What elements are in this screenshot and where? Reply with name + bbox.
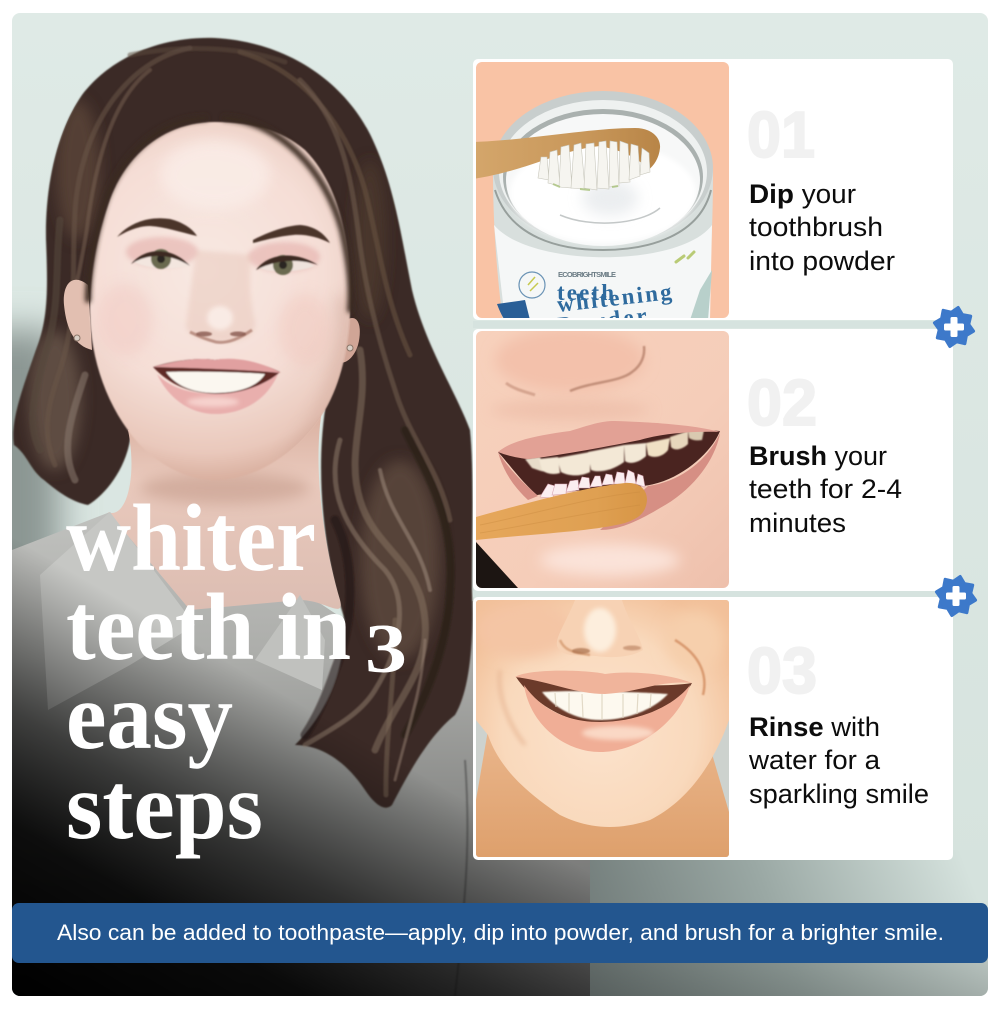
hair tone patches [29, 100, 440, 660]
earrings [74, 335, 80, 341]
step text: sparkling smile [749, 779, 929, 809]
icon: plus badge 2 [932, 572, 980, 620]
photo: jar of whitening powder with toothbrush: Powder [556, 303, 648, 338]
eye shadows [126, 237, 198, 267]
toothbrush handle [473, 128, 660, 179]
step text: minutes [749, 508, 846, 538]
woman portrait [12, 38, 590, 996]
jar rim glass [493, 91, 713, 245]
step text: Rinse with [749, 712, 880, 742]
face details [102, 140, 350, 442]
step text [749, 179, 895, 276]
upper teeth [525, 430, 704, 475]
step number: 03 [747, 634, 817, 707]
eyes [131, 249, 318, 275]
lower lip [600, 433, 720, 530]
title: steps [66, 753, 263, 859]
step text [748, 712, 929, 809]
title: 3 [365, 611, 407, 688]
photo: bright smile close-up [475, 600, 729, 857]
jar label text: ECOBRIGHTSMILE [558, 270, 616, 279]
panel: step 2 [473, 328, 953, 591]
title: easy [66, 663, 233, 769]
nose lines [570, 346, 644, 391]
photo: jar of whitening powder with toothbrush: whitening [556, 279, 673, 317]
callout banner: Also can be added to toothpaste—apply, dip into powder, and brush for a brighter smile. [57, 920, 944, 945]
hair highlights [33, 48, 451, 795]
upper lip [515, 671, 692, 694]
bristles [538, 141, 650, 190]
shirt [12, 512, 590, 996]
step text: teeth for 2-4 [749, 474, 902, 504]
dark gradient overlay [12, 550, 590, 996]
panel: step 3 [473, 597, 953, 860]
title [66, 485, 407, 859]
seal [519, 272, 545, 298]
mouth interior [498, 430, 720, 495]
neck [476, 730, 729, 857]
panel: step 1 [473, 59, 953, 338]
icon: plus badge 1 [930, 303, 978, 351]
nose [557, 600, 643, 657]
title: teeth in [66, 574, 351, 680]
hair corner [476, 542, 518, 588]
step text: into powder [749, 246, 895, 276]
photo: brushing teeth close-up [476, 328, 729, 588]
step text: Brush your [749, 441, 887, 471]
divider strip between cards [473, 321, 953, 597]
teeth [542, 691, 668, 720]
step number: 02 [747, 366, 817, 439]
lower lip [524, 685, 690, 752]
step number: 01 [747, 98, 815, 171]
title: whiter [66, 485, 316, 591]
face [476, 600, 729, 827]
photo: jar of whitening powder with toothbrush: teeth [557, 280, 614, 305]
nose shading [186, 250, 255, 342]
step text: toothbrush [749, 212, 883, 242]
hair back [13, 38, 473, 808]
hair front strands framing face [88, 118, 351, 310]
face [90, 122, 350, 480]
mouth interior [516, 677, 692, 724]
collar [40, 512, 195, 710]
mouth [153, 359, 281, 414]
step text [749, 441, 902, 538]
brows [117, 218, 197, 237]
upper lip [498, 421, 720, 459]
leaf marks [676, 252, 694, 262]
bristles [540, 470, 645, 498]
toothbrush handle [476, 483, 647, 540]
neck [108, 410, 341, 610]
callout banner [12, 903, 988, 963]
smile creases [499, 670, 525, 745]
photo: jar of whitening powder with toothbrush [473, 62, 729, 338]
ears [64, 280, 92, 350]
step text: water for a [748, 745, 881, 775]
jar body [493, 170, 713, 330]
step text: Dip your [749, 179, 856, 209]
